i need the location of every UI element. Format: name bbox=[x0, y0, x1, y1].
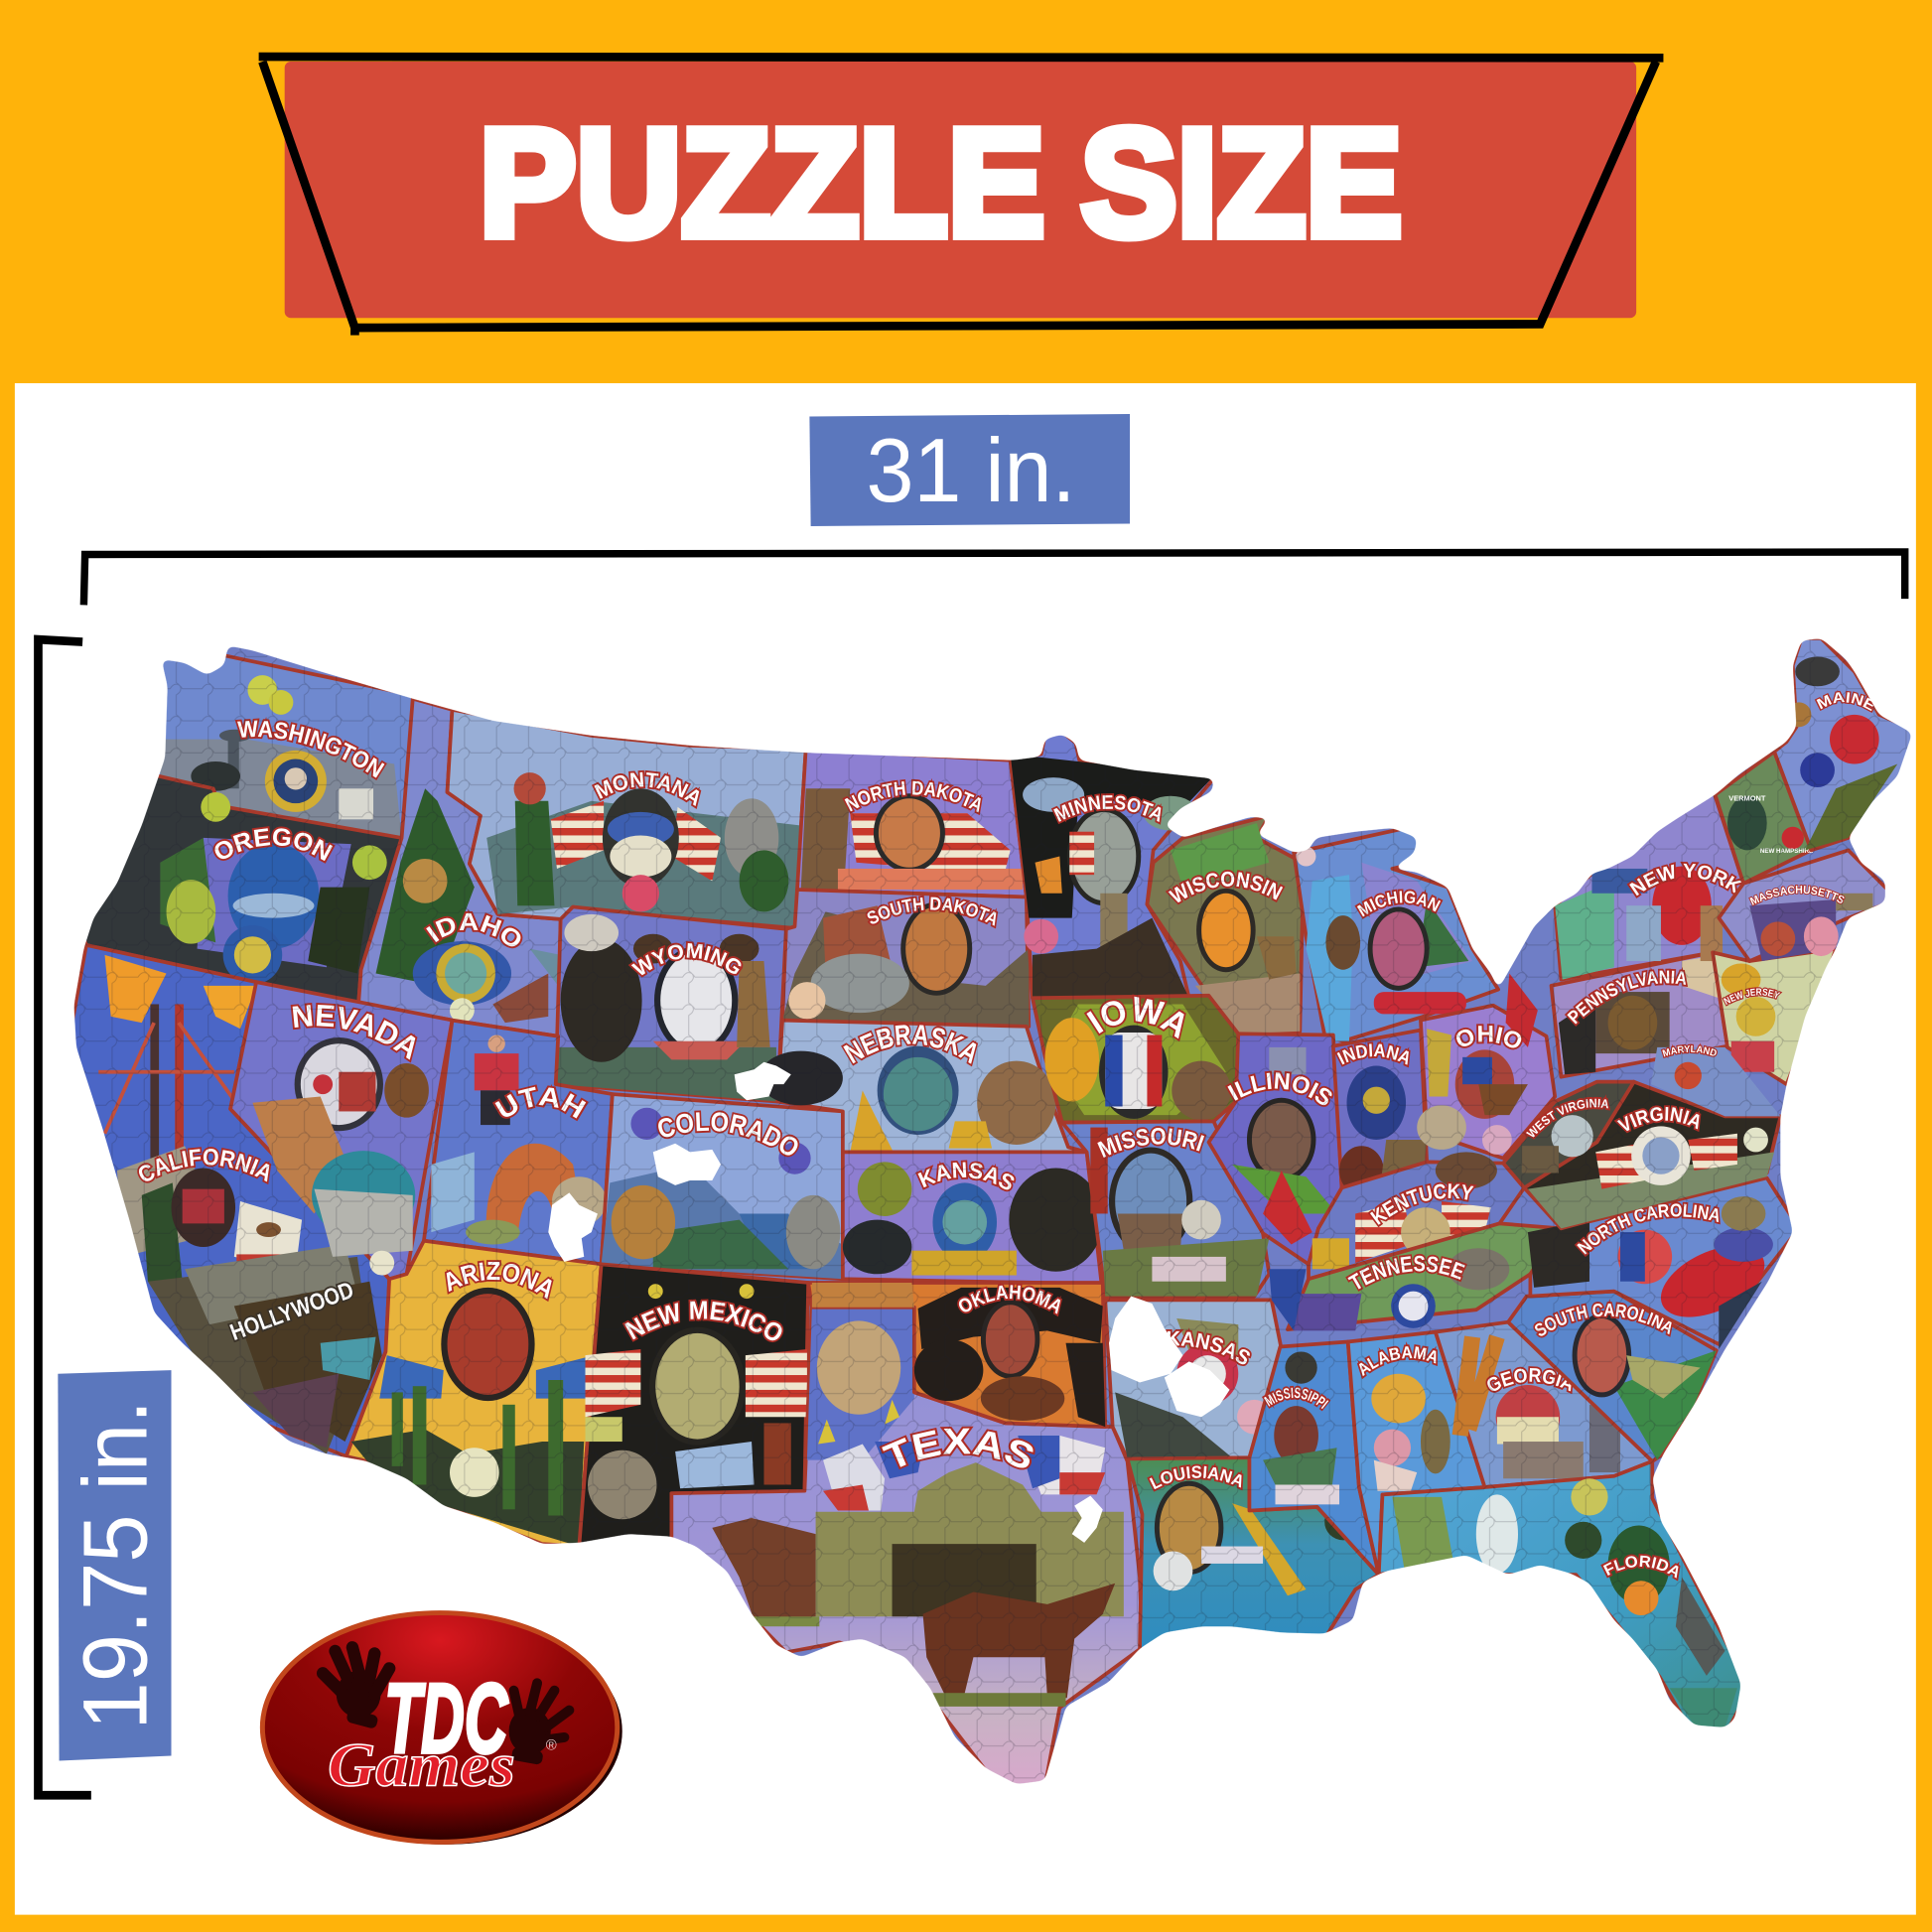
state: Nebraska bbox=[766, 1019, 1082, 1151]
state: West Virginia: WEST VIRGINIA bbox=[1524, 1096, 1609, 1141]
state: Arkansas bbox=[1104, 1299, 1283, 1457]
state: Oregon bbox=[85, 774, 400, 1000]
state: Minnesota: MINNESOTA bbox=[1050, 793, 1164, 825]
state: California: HOLLYWOOD bbox=[227, 1281, 353, 1342]
state: Nevada: NEVADA bbox=[290, 1003, 417, 1062]
height dimension bracket bbox=[38, 639, 91, 1795]
state: Kentucky: KENTUCKY bbox=[1367, 1180, 1474, 1230]
state: Wyoming bbox=[555, 905, 788, 1104]
state: Oregon: OREGON bbox=[212, 826, 336, 864]
state: Georgia: GEORGIA bbox=[1483, 1365, 1578, 1398]
state: Wisconsin bbox=[1146, 817, 1305, 1033]
state: Colorado: COLORADO bbox=[657, 1110, 800, 1158]
state: Alabama: ALABAMA bbox=[1353, 1342, 1442, 1380]
state: Maine bbox=[1774, 638, 1922, 850]
title banner: PUZZLE bbox=[480, 97, 1044, 268]
state: Wisconsin: WISCONSIN bbox=[1166, 870, 1285, 905]
state: Pennsylvania bbox=[1552, 952, 1727, 1077]
state: Idaho: IDAHO bbox=[423, 909, 522, 949]
state: California bbox=[73, 943, 387, 1457]
state: Kansas bbox=[841, 1150, 1102, 1281]
width label: 31 in. bbox=[809, 414, 1130, 526]
state: Nevada bbox=[228, 980, 453, 1280]
state: South Dakota: SOUTH DAKOTA bbox=[866, 895, 999, 929]
state: Iowa bbox=[1031, 993, 1239, 1122]
state: Indiana bbox=[1333, 1031, 1427, 1195]
states: Massachusetts, Connecticut and Rhode Island bbox=[1719, 850, 1897, 961]
state: North Dakota bbox=[795, 753, 1025, 896]
state: Georgia bbox=[1434, 1320, 1649, 1485]
state: Mississippi: MISSISSIPPI bbox=[1263, 1386, 1330, 1413]
state: Louisiana bbox=[1127, 1455, 1377, 1648]
title banner bbox=[259, 57, 1663, 336]
state: Kansas: KANSAS bbox=[915, 1160, 1017, 1191]
states: New Jersey, Delaware and Maryland: NEW JERSEY bbox=[1723, 987, 1781, 1008]
state: Arizona bbox=[345, 1239, 600, 1544]
state: South Carolina: SOUTH CAROLINA bbox=[1531, 1300, 1678, 1341]
state: Michigan and Lake Michigan: MICHIGAN bbox=[1354, 890, 1444, 919]
state: Mississippi bbox=[1247, 1340, 1376, 1575]
registered mark: ® bbox=[546, 1737, 557, 1753]
states: New Jersey, Delaware and Maryland: MARYLAND bbox=[1661, 1044, 1718, 1059]
states: New Jersey, Delaware and Maryland bbox=[1651, 949, 1836, 1116]
icon: left hand bbox=[323, 1647, 389, 1728]
state: Indiana: INDIANA bbox=[1334, 1039, 1415, 1069]
state: Wyoming: WYOMING bbox=[627, 941, 743, 978]
state: Maine: MAINE bbox=[1815, 690, 1877, 715]
state: South Carolina bbox=[1507, 1293, 1719, 1462]
state: Nebraska: NEBRASKA bbox=[841, 1022, 979, 1066]
state: Utah: UTAH bbox=[492, 1084, 589, 1122]
icon: right hand bbox=[509, 1683, 569, 1764]
state: New Mexico: NEW MEXICO bbox=[621, 1299, 784, 1342]
state: Illinois bbox=[1207, 1032, 1340, 1265]
state: Missouri: MISSOURI bbox=[1094, 1123, 1207, 1163]
state: South Dakota bbox=[783, 888, 1031, 1029]
state: Oklahoma bbox=[808, 1281, 1108, 1429]
state: Arkansas: ARKANSAS bbox=[1136, 1327, 1254, 1370]
state: Washington: WASHINGTON bbox=[234, 717, 387, 780]
state: Pennsylvania: PENNSYLVANIA bbox=[1564, 966, 1688, 1028]
state: North Dakota: NORTH DAKOTA bbox=[842, 778, 983, 816]
state: West Virginia bbox=[1503, 1082, 1634, 1187]
state: Montana: MONTANA bbox=[592, 770, 701, 809]
state: Kentucky bbox=[1309, 1152, 1524, 1279]
states: Massachusetts, Connecticut and Rhode Island: MASSACHUSETTS bbox=[1748, 885, 1846, 908]
states: Vermont and New Hampshire bbox=[1716, 752, 1813, 884]
state: California: CALIFORNIA bbox=[137, 1147, 272, 1185]
state: Alabama bbox=[1346, 1330, 1482, 1569]
state: New York bbox=[1555, 788, 1745, 980]
state: North Carolina: NORTH CAROLINA bbox=[1574, 1199, 1723, 1258]
puzzle piece texture bbox=[62, 628, 1922, 1799]
state: Michigan and Lake Michigan bbox=[1292, 828, 1501, 1042]
missing puzzle pieces bbox=[548, 1062, 1230, 1543]
state: Tennessee: TENNESSEE bbox=[1345, 1251, 1467, 1296]
state: Illinois: ILLINOIS bbox=[1224, 1067, 1337, 1112]
logo wordmark: TDC: TDC bbox=[384, 1664, 508, 1774]
height label: 19.75 in.: 19.75 in. bbox=[66, 1400, 167, 1729]
state: Virginia bbox=[1524, 1082, 1780, 1228]
logo wordmark: Games: Games bbox=[328, 1731, 515, 1799]
state: Tennessee bbox=[1269, 1223, 1561, 1330]
state: Florida bbox=[1378, 1460, 1740, 1727]
width dimension bracket bbox=[83, 552, 1905, 605]
width label: 31 in.: 31 in. bbox=[866, 421, 1075, 521]
state: Louisiana: LOUISIANA bbox=[1147, 1462, 1248, 1493]
state: Texas: TEXAS bbox=[880, 1426, 1035, 1469]
state: Florida: FLORIDA bbox=[1600, 1553, 1684, 1583]
state: Arizona: ARIZONA bbox=[445, 1260, 554, 1303]
state: New York: NEW YORK bbox=[1626, 860, 1745, 900]
states: Vermont and New Hampshire: VERMONT bbox=[1728, 794, 1766, 803]
state: Oklahoma: OKLAHOMA bbox=[957, 1283, 1062, 1316]
state: Iowa: IOWA bbox=[1084, 995, 1186, 1041]
panel: white content area bbox=[15, 383, 1916, 1915]
state: Utah bbox=[422, 1019, 614, 1263]
state: Colorado bbox=[600, 1092, 842, 1281]
title banner: SIZE bbox=[1080, 97, 1402, 268]
state: Texas bbox=[669, 1308, 1140, 1784]
state: Montana bbox=[445, 710, 804, 927]
state: Missouri bbox=[1062, 1120, 1271, 1299]
TDC Games logo bbox=[262, 1613, 622, 1845]
puzzle map of the United States bbox=[73, 639, 1910, 1783]
state: New Mexico bbox=[578, 1263, 810, 1543]
state: Ohio bbox=[1417, 973, 1555, 1159]
state: Idaho bbox=[357, 698, 559, 1035]
states: Vermont and New Hampshire: NEW HAMPSHIRE bbox=[1760, 848, 1813, 855]
state: Virginia: VIRGINIA bbox=[1615, 1103, 1705, 1138]
state: North Carolina bbox=[1528, 1177, 1799, 1349]
state: Minnesota bbox=[1009, 736, 1213, 999]
state: Ohio: OHIO bbox=[1451, 1021, 1526, 1055]
state: Washington bbox=[159, 653, 411, 836]
